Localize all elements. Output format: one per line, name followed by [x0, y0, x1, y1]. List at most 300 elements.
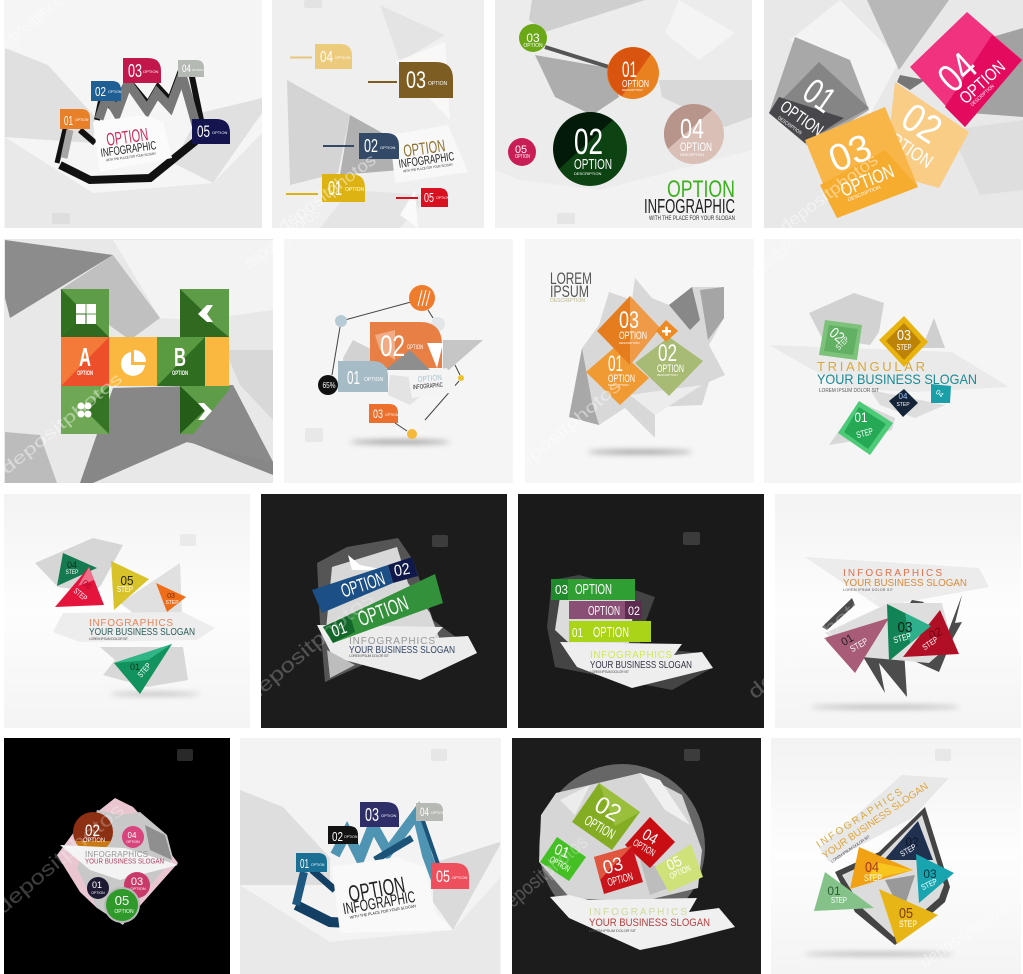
square 04 [889, 389, 918, 417]
square 03: 03 [601, 854, 626, 879]
circle 05: OPTION [515, 154, 530, 160]
tab 03: 03 [406, 67, 426, 94]
square 04: STEP [896, 402, 910, 408]
ground shadow [110, 692, 200, 696]
triangle 01 [814, 872, 874, 911]
triangle 06 [55, 567, 104, 607]
panel: diamonds, lorem ipsum [525, 239, 754, 483]
panel: triangles with dark spikes [775, 494, 1021, 728]
speech card: option infographic: OPTION [105, 124, 149, 150]
triangle 02 [903, 610, 959, 657]
heading: option infographic: INFOGRAPHIC [644, 196, 735, 218]
heading: infographics slogan: YOUR BUSINESS SLOGAN [590, 660, 692, 671]
tab 05: OPTION [452, 875, 467, 880]
panel: green and orange tile cross [4, 239, 273, 483]
tile: B option: OPTION [172, 371, 188, 377]
bar 02: 02 [628, 604, 640, 618]
card 02 [876, 82, 969, 188]
triangle 01: 01 [839, 632, 856, 649]
tab 01 [60, 109, 90, 129]
arrow banner [317, 625, 477, 680]
triangle 05 [879, 889, 938, 944]
square 01: STEP [855, 426, 874, 440]
heading: lorem ipsum: DESCRIPTION [550, 298, 585, 304]
node: 65 percent [318, 375, 338, 395]
triangle 04 [850, 847, 913, 889]
circle 05: 05 [515, 144, 527, 156]
speech card: option infographic [93, 115, 172, 172]
tab 04: 04 [182, 63, 191, 75]
triangle 02: 02 [905, 835, 919, 849]
heading: infographics slogan [589, 907, 710, 933]
watermark: depositphotos on light panels: depositphotos [274, 150, 380, 236]
ground shadow [588, 450, 692, 454]
green ribbon: OPTION [355, 592, 412, 631]
green ribbon: 01 [329, 618, 349, 641]
tab 03 [369, 404, 399, 423]
triangle 04: STEP [864, 873, 882, 883]
heading: infographics slogan: LOREM IPSUM DOLOR SIT [349, 654, 390, 658]
square 02: 02 [590, 791, 626, 828]
diamond 02 [635, 337, 703, 396]
option infographic card [390, 125, 468, 183]
option infographic card: OPTION [402, 136, 446, 161]
bar 01 [569, 621, 651, 642]
panel: black with circles on pink crystal [4, 738, 230, 974]
square 03: OPTION [606, 871, 634, 889]
heading: rotated slogan: YOUR BUSINESS SLOGAN [820, 781, 931, 861]
circle 01: OPTION [622, 79, 649, 90]
circle 03 [519, 24, 547, 52]
tab 05: 05 [424, 190, 434, 205]
triangle 03: STEP [892, 631, 912, 645]
square 02: 02 [826, 324, 848, 346]
tab 05 [431, 863, 469, 889]
square 03 [594, 846, 643, 894]
square 02: STEP [834, 335, 851, 352]
triangle 01: 01 [827, 884, 841, 898]
circle 05 [508, 138, 536, 166]
circle 03: 03 [131, 876, 143, 888]
panel: triangular business slogan [764, 239, 1021, 483]
node: pale circles [335, 315, 445, 331]
circle 05: OPTION [114, 909, 134, 915]
square teal [931, 384, 951, 403]
heading: infographics slogan [85, 850, 164, 866]
triangle 03: STEP [920, 877, 939, 892]
heading: lorem ipsum [550, 269, 592, 304]
card 02: 02 [894, 95, 949, 153]
option infographic card: WITH THE PLACE FOR YOUR SLOGAN [403, 162, 453, 173]
square 04 [625, 817, 675, 868]
card: option infographic: OPTION [417, 373, 442, 384]
crumpled backdrop [343, 340, 483, 405]
triangle 02 [884, 821, 933, 860]
circle 03: OPTION [130, 886, 146, 891]
circle 01: DESCRIPTION [622, 88, 643, 92]
square 02: OPTION [582, 812, 618, 842]
ground shadow [350, 440, 450, 444]
square 01 [838, 401, 893, 455]
plus diamond [656, 320, 678, 342]
triangle orange [156, 583, 186, 612]
watermark: depositphotos on light panels: depositphotos [0, 369, 126, 478]
heading: infographics slogan: YOUR BUSINESS SLOGAN [85, 856, 164, 866]
diamond 01 [586, 347, 649, 405]
triangle green: STEP [136, 661, 153, 679]
triangle 02: STEP [899, 842, 918, 859]
circle 04: 04 [680, 113, 704, 144]
tab 04: OPTION [335, 55, 350, 60]
triangle 05: STEP [117, 585, 133, 594]
tab 02 [323, 133, 399, 159]
heading: infographics slogan: YOUR BUSINESS SLOGAN [589, 917, 710, 929]
square 03: STEP [896, 343, 912, 352]
diamond 02: OPTION [657, 363, 684, 375]
tab 01 [338, 361, 388, 392]
diamond 01: OPTION [608, 373, 635, 385]
heading: infographics slogan: LOREM IPSUM DOLOR SIT [589, 928, 637, 933]
circle 01: 01 [622, 57, 637, 82]
square 02 [572, 783, 640, 850]
tab 02 [370, 322, 443, 370]
triangle 03 [887, 604, 931, 661]
panel: network of nodes with tabs [284, 239, 513, 483]
triangle 03 [916, 854, 954, 903]
watermark: depositphotos on light panels: depositphotos [776, 150, 882, 236]
tab 05: 05 [436, 867, 450, 886]
heading: option infographic [644, 176, 735, 222]
tab 03: 03 [373, 407, 383, 421]
tab 05 [396, 188, 450, 207]
heading: rotated slogan: LOREM IPSUM DOLOR SIT [830, 834, 871, 864]
panel: colored triangles with slogan [4, 494, 250, 728]
circle 04: OPTION [126, 840, 140, 844]
circle 01 [607, 47, 659, 99]
square 05 [655, 844, 703, 892]
card 04: DESCRIPTION [970, 83, 996, 108]
watermark: depositphotos on light panels: depositphotos [917, 900, 1010, 971]
panel: geometric tabs with dashes [272, 0, 484, 228]
bar 02 [569, 601, 642, 619]
card 03 [805, 107, 918, 218]
speech card: option infographic [332, 857, 453, 933]
card 04: OPTION [956, 57, 1009, 108]
icons: camera watermarks on dark panels [177, 532, 700, 761]
triangle 01 [824, 618, 889, 673]
circle 04: 04 [128, 831, 137, 840]
card: option infographic [408, 368, 458, 398]
triangle 04: STEP [66, 570, 78, 576]
square 01: OPTION [548, 854, 572, 874]
blue ribbon [312, 557, 418, 613]
bar 01: OPTION [593, 624, 629, 641]
square 05: 05 [664, 853, 685, 874]
heading: infographics slogan: INFOGRAPHICS [590, 650, 672, 661]
tile: four circles [61, 386, 109, 434]
arrow banner [550, 895, 735, 950]
circle 04 [664, 104, 724, 164]
triangle 04 [57, 553, 97, 586]
circle 02: DESCRIPTION [574, 171, 601, 176]
heading: infographics slogan: INFOGRAPHICS [89, 618, 173, 629]
card 03: DESCRIPTION [847, 184, 882, 203]
tab 02: OPTION [380, 145, 395, 150]
watermark: depositphotos on light panels: depositphotos [241, 203, 323, 273]
heading: infographics slogan [843, 568, 967, 592]
tab 02: 02 [380, 330, 405, 363]
circle 03: OPTION [523, 43, 543, 49]
triangle orange: STEP [165, 600, 179, 606]
tab 04: 04 [420, 805, 429, 819]
tile: right chevron [180, 386, 229, 434]
tile: B option: B [174, 342, 186, 372]
speech card: option infographic: INFOGRAPHIC [342, 889, 417, 918]
heading: infographics slogan [89, 618, 195, 641]
tile: B option [157, 337, 205, 386]
heading: rotated slogan: INFOGRAPHICS [815, 787, 905, 851]
diamond 03: OPTION [619, 330, 647, 342]
triangle 02: 02 [926, 624, 945, 643]
circle 01 [87, 877, 109, 899]
tab 02: OPTION [344, 835, 358, 839]
speech card: option infographic: WITH THE PLACE FOR YOUR SLOGAN [349, 903, 416, 920]
tab 03: OPTION [143, 69, 158, 74]
card 01: OPTION [777, 97, 827, 140]
triangle 05: 05 [120, 573, 134, 588]
tab 02: OPTION [407, 345, 423, 351]
heading: infographics slogan: YOUR BUSINESS SLOGAN [349, 645, 455, 656]
triangle 04: 04 [67, 560, 77, 570]
card 03: OPTION [838, 161, 897, 202]
tab 02: 02 [95, 84, 106, 99]
card 02: OPTION [876, 124, 936, 173]
tab 03: 03 [365, 805, 379, 825]
circle 01: OPTION [91, 891, 105, 895]
bar 03: OPTION [575, 581, 612, 598]
node: orange circle [409, 285, 435, 311]
triangle 05: STEP [899, 919, 917, 929]
heading: infographics slogan: YOUR BUSINESS SLOGAN [843, 578, 967, 589]
blue ribbon: OPTION [339, 569, 388, 602]
tab 01: 01 [328, 178, 342, 200]
circle 02 [553, 112, 627, 186]
node: yellow dots [407, 375, 464, 439]
blue ribbon: 02 [393, 561, 412, 580]
heading: lorem ipsum: IPSUM [550, 282, 589, 301]
square 04: 04 [639, 826, 661, 849]
circle 02: OPTION [83, 838, 105, 844]
circle 05 [104, 887, 140, 923]
tab 01: OPTION [345, 187, 365, 193]
watermark: depositphotos on light panels: depositphotos [505, 377, 625, 481]
tab 04 [416, 803, 445, 821]
panel: blue zigzag with tabs [240, 738, 501, 974]
triangle 01: STEP [831, 896, 847, 905]
diamond 03: 03 [619, 307, 639, 334]
tile: window icon [61, 289, 109, 337]
tab 02: OPTION [108, 90, 122, 94]
crumpled paper shape [569, 278, 725, 438]
circle 04: OPTION [680, 140, 712, 154]
diamond 02: DESCRIPTION [657, 373, 678, 377]
tile: pie chart [109, 337, 157, 386]
square 01: 01 [854, 409, 868, 425]
speech card: option infographic: WITH THE PLACE FOR YOUR SLOGAN [106, 151, 156, 162]
dark spikes [822, 595, 962, 697]
option infographic card: INFOGRAPHIC [398, 149, 455, 171]
square 05: OPTION [668, 863, 692, 881]
bar 02: OPTION [588, 603, 620, 618]
square 01 [540, 837, 586, 881]
watermark: depositphotos across dark panels: depositphotos [242, 587, 379, 707]
tab 03: OPTION [428, 81, 448, 87]
triangle green [114, 644, 172, 694]
triangle 03: 03 [898, 619, 912, 636]
heading: infographics slogan: LOREM IPSUM DOLOR SIT [590, 670, 630, 674]
panel: circles with option infographic [495, 0, 752, 228]
circle 01: 01 [92, 880, 102, 890]
circle 05: 05 [115, 893, 129, 908]
arrow banner [60, 845, 178, 880]
panel: dark with crystal sphere and squares [512, 738, 761, 974]
tab 01: OPTION [75, 118, 89, 122]
node: 65 percent: 65% [322, 381, 336, 390]
heading: triangular slogan [817, 359, 977, 394]
heading: triangular slogan: TRIANGULAR [817, 359, 925, 374]
circle 02: 02 [574, 121, 603, 162]
tab 01 [296, 853, 327, 872]
zigzag ribbon [296, 813, 440, 925]
diamond 02: 02 [658, 340, 677, 367]
square 03 [879, 316, 928, 367]
circle 02: OPTION [574, 156, 612, 173]
diamond 01: 01 [608, 351, 623, 376]
circle 02: 02 [85, 821, 100, 840]
tab 05: OPTION [436, 196, 450, 200]
triangle 06: STEP [72, 586, 89, 603]
tab 02: 02 [332, 829, 343, 844]
square teal: 04 [934, 389, 944, 399]
triangle orange: 03 [167, 593, 175, 600]
card 03: 03 [823, 127, 878, 181]
triangle 05 [111, 561, 149, 610]
heading: infographics slogan: LOREM IPSUM DOLOR SIT [89, 637, 129, 641]
tab 01: OPTION [364, 377, 384, 383]
circle 04 [122, 826, 144, 848]
diamond 01: DESCRIPTION [608, 383, 629, 387]
heading: infographics slogan: YOUR BUSINESS SLOGAN [89, 627, 195, 638]
watermark: depositphotos across dark panels [0, 584, 881, 919]
connectors [332, 302, 460, 431]
square 04: OPTION [631, 838, 657, 859]
tab 01: 01 [300, 856, 309, 871]
tab 01 [286, 174, 365, 202]
ground shadow [810, 706, 960, 708]
tab 05: 05 [197, 122, 210, 141]
panel: dark with three option bars [518, 494, 764, 728]
panel: orange-crimson tabs on black zigzag [4, 0, 262, 228]
tab 03 [360, 802, 399, 827]
tab 01: 01 [64, 113, 73, 128]
square 02 [819, 320, 862, 360]
triangle 04: 04 [865, 859, 879, 876]
panel: triangles on dark frame with rotated slogan [771, 738, 1021, 974]
triangle 02: STEP [921, 635, 940, 652]
tab 03 [368, 62, 453, 98]
diamond 03 [597, 296, 660, 365]
speech card: option infographic: INFOGRAPHIC [100, 138, 157, 160]
arrow banner [560, 642, 713, 688]
tile: A option: A [79, 342, 91, 372]
watermark: depositphotos on light panels: depositphotos [745, 224, 811, 283]
heading: infographics slogan: INFOGRAPHICS [843, 568, 942, 579]
heading: infographics slogan [590, 650, 692, 674]
tab 05 [192, 119, 230, 144]
heading: infographics slogan: LOREM IPSUM DOLOR SIT [843, 588, 894, 592]
panel: rotated glossy squares [764, 0, 1023, 228]
heading: option infographic: WITH THE PLACE FOR YOUR SLOGAN [649, 216, 735, 222]
triangle 01: STEP [848, 636, 870, 654]
card 04 [910, 12, 1022, 127]
tab 04 [290, 44, 352, 69]
card: option infographic: INFOGRAPHIC [413, 382, 443, 391]
tile: yellow [205, 337, 229, 386]
triangle green: 01 [130, 662, 140, 672]
watermark: depositphotos across dark panels: depositphotos [744, 584, 881, 704]
heading: triangular slogan: LOREM IPSUM DOLOR SIT [819, 388, 880, 394]
tab 05: OPTION [212, 130, 227, 135]
heading: triangular slogan: YOUR BUSINESS SLOGAN [817, 371, 977, 387]
tab 01: 01 [347, 368, 360, 388]
tile: A option: OPTION [77, 371, 93, 377]
tile: A option [61, 337, 109, 386]
tab 02 [328, 826, 358, 844]
triangle 06: 06 [80, 578, 94, 592]
tab 01: OPTION [311, 863, 325, 867]
tab 02: 02 [364, 136, 378, 156]
ground shadow [804, 952, 954, 956]
bar 03 [551, 579, 635, 600]
bar 01: 01 [572, 625, 583, 640]
tab 04 [178, 60, 204, 77]
heading: option infographic: OPTION [667, 176, 735, 203]
diamond 03: DESCRIPTION [619, 341, 640, 345]
triangle 03: 03 [923, 867, 937, 881]
panel: dark with blue and green ribbons [261, 494, 507, 728]
tab 04: 04 [320, 49, 333, 66]
heading: infographics slogan: INFOGRAPHICS [349, 636, 435, 647]
green ribbon [323, 574, 443, 643]
tab 03: OPTION [381, 813, 396, 818]
circle 02 [73, 812, 113, 852]
tab 03 [123, 58, 161, 83]
square 04: 04 [899, 392, 908, 401]
circle 03: 03 [526, 31, 540, 45]
tab 03: 03 [128, 61, 142, 81]
tile: left chevron [180, 289, 229, 337]
card 01 [769, 62, 869, 143]
circle 03 [124, 872, 150, 898]
circle 04: DESCRIPTION [680, 153, 704, 157]
card 04: 04 [930, 44, 986, 101]
icons: camera watermarks on light panels [52, 0, 951, 761]
card 01: DESCRIPTION [776, 115, 803, 136]
square 01: 01 [552, 841, 572, 862]
watermark: depositphotos across dark panels: depositphotos [494, 831, 592, 919]
triangle 05: 05 [899, 905, 913, 922]
heading: infographics slogan: INFOGRAPHICS [589, 907, 687, 918]
